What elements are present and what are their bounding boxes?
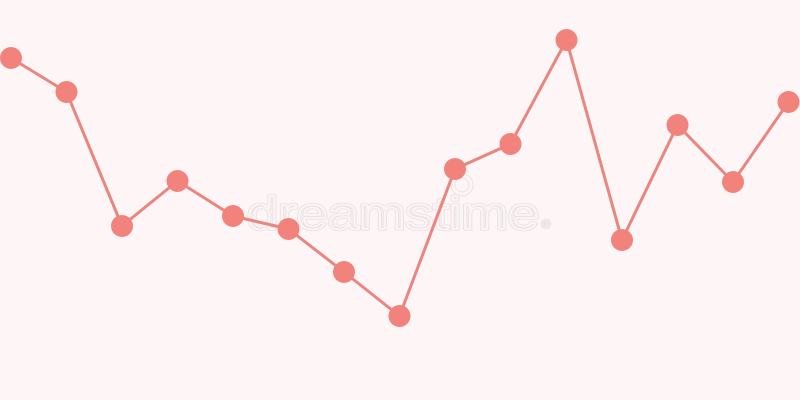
watermark: dreamstime bbox=[247, 188, 539, 239]
data line bbox=[11, 40, 788, 316]
watermark bbox=[247, 174, 552, 239]
watermark: dreamstime bbox=[247, 188, 539, 239]
data points bbox=[0, 29, 800, 327]
